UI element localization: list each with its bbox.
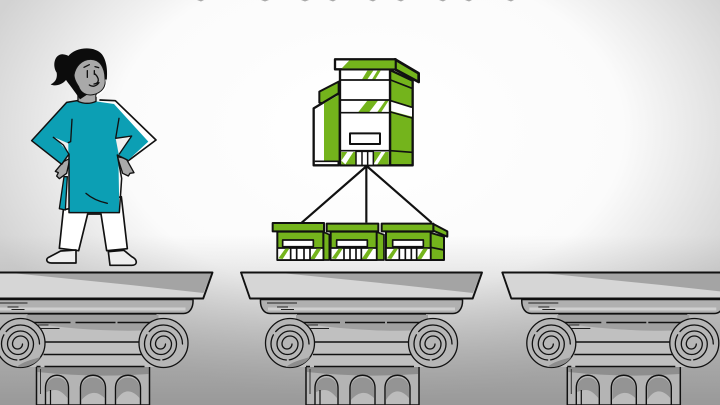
side wall bbox=[390, 70, 413, 165]
store: right bbox=[382, 224, 447, 260]
face bbox=[74, 59, 105, 95]
store: middle bbox=[327, 224, 384, 260]
hands bbox=[55, 157, 134, 179]
branch stores bbox=[273, 223, 447, 260]
facial features bbox=[84, 65, 99, 86]
pillar: right bbox=[502, 272, 720, 405]
neck bbox=[78, 87, 96, 103]
tunic bbox=[32, 101, 148, 213]
pillar: centre bbox=[241, 272, 482, 405]
entrance bbox=[341, 152, 389, 164]
left annex bbox=[319, 82, 339, 107]
tunic back flap bbox=[59, 177, 67, 210]
shoes bbox=[47, 250, 136, 265]
tunic fold lines bbox=[53, 118, 132, 203]
sign bbox=[350, 133, 380, 144]
trousers bbox=[59, 197, 127, 251]
white shoulder outline bbox=[100, 100, 156, 161]
store: left bbox=[273, 223, 329, 260]
connector lines bbox=[302, 166, 432, 223]
hair bbox=[51, 48, 107, 99]
roof bbox=[395, 59, 419, 82]
main facade bbox=[340, 69, 390, 165]
gaps between arms and body bbox=[55, 136, 131, 154]
hub building with branch links bbox=[302, 59, 432, 223]
person standing with hands on hips bbox=[32, 48, 156, 265]
pillar: left bbox=[0, 272, 212, 405]
